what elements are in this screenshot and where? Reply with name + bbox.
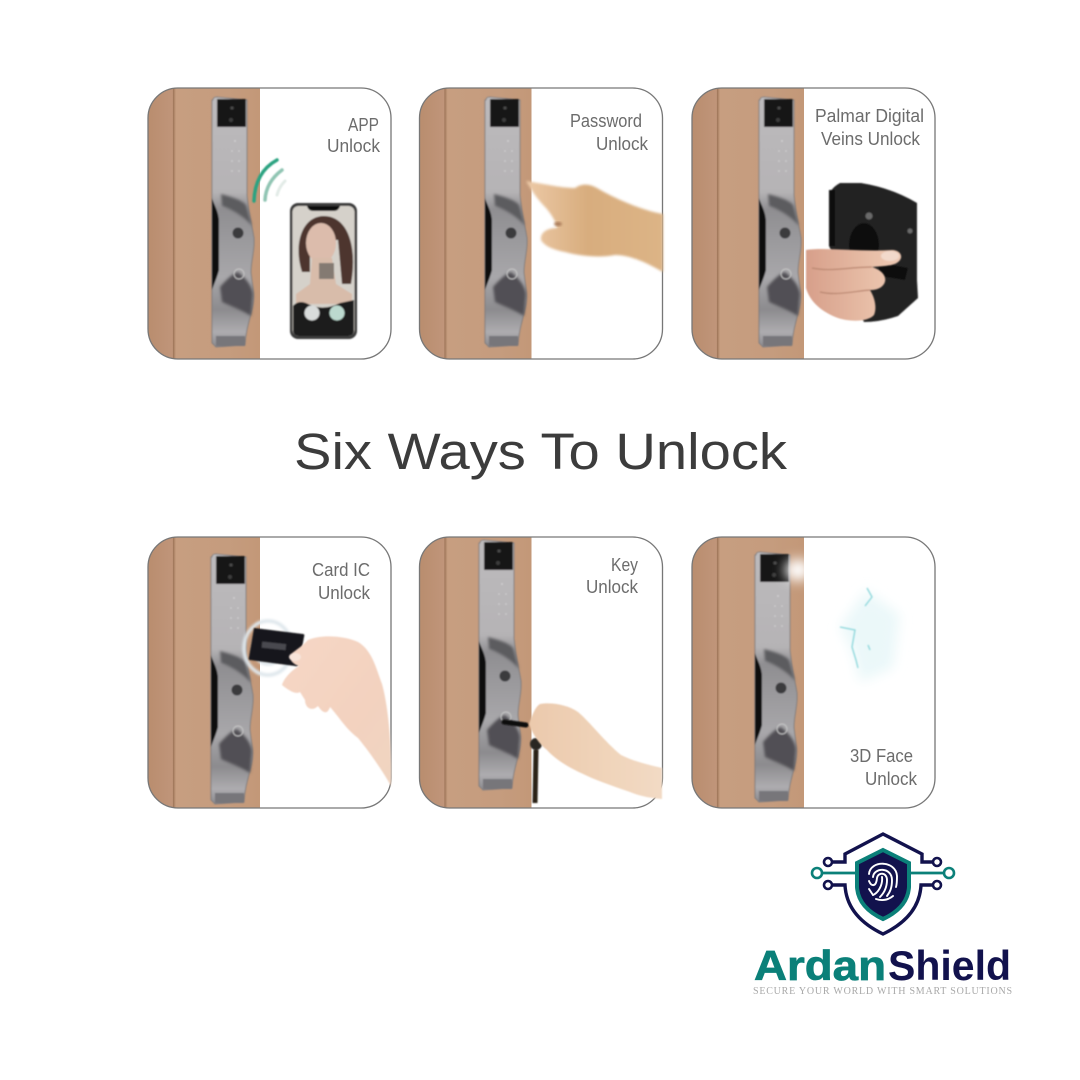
icon: wireless signal arcs xyxy=(254,160,285,201)
label: Card IC Unlock: Unlock xyxy=(318,582,371,603)
label: Password Unlock: Unlock xyxy=(596,133,649,154)
label: APP Unlock: Unlock xyxy=(327,135,381,156)
lock: Password panel xyxy=(485,97,527,347)
hand holding card xyxy=(282,636,391,786)
label: 3D Face Unlock: Unlock xyxy=(865,768,918,789)
palm scanner device xyxy=(829,183,918,322)
phone with face photo xyxy=(290,203,357,339)
lock: Card panel xyxy=(211,554,253,804)
label: Card IC Unlock: Card IC xyxy=(312,559,370,580)
icon: circuit shield with fingerprint xyxy=(812,834,954,934)
panel: 3D Face unlock xyxy=(692,537,935,808)
label: APP Unlock: APP xyxy=(348,114,379,135)
3D face scan mesh xyxy=(840,588,900,682)
key in lock xyxy=(504,722,542,803)
tagline: SECURE YOUR WORLD WITH SMART SOLUTIONS xyxy=(753,986,1012,997)
label: Key Unlock: Key xyxy=(611,554,639,575)
label: Palmar Digital Veins Unlock: Veins Unlock xyxy=(821,128,921,149)
hand pressing keypad xyxy=(526,181,663,272)
camera flash glow xyxy=(785,559,811,581)
title: Six Ways To Unlock xyxy=(294,423,788,480)
NFC rings xyxy=(244,621,292,675)
hand turning key xyxy=(529,703,662,799)
label: Palmar Digital Veins Unlock: Palmar Digital xyxy=(815,105,924,126)
lock: Key panel xyxy=(479,540,521,790)
IC card xyxy=(249,628,304,666)
label: Password Unlock: Password xyxy=(570,110,642,131)
lock: APP panel xyxy=(212,97,254,347)
logo: ArdanShield xyxy=(753,834,1012,997)
label: Key Unlock: Unlock xyxy=(586,576,639,597)
panel: Card IC unlock xyxy=(148,537,391,808)
wordmark: Shield xyxy=(888,942,1011,989)
label: 3D Face Unlock: 3D Face xyxy=(850,745,913,766)
hand in scanner xyxy=(806,249,901,321)
panel: Key unlock xyxy=(420,537,662,808)
lock: Face panel xyxy=(755,552,797,802)
panel: Palmar Digital Veins unlock xyxy=(692,88,935,359)
panel: APP unlock xyxy=(148,88,391,359)
panel: Password unlock xyxy=(420,88,663,359)
wordmark: Ardan xyxy=(754,942,886,989)
lock: Palm panel xyxy=(759,97,801,347)
